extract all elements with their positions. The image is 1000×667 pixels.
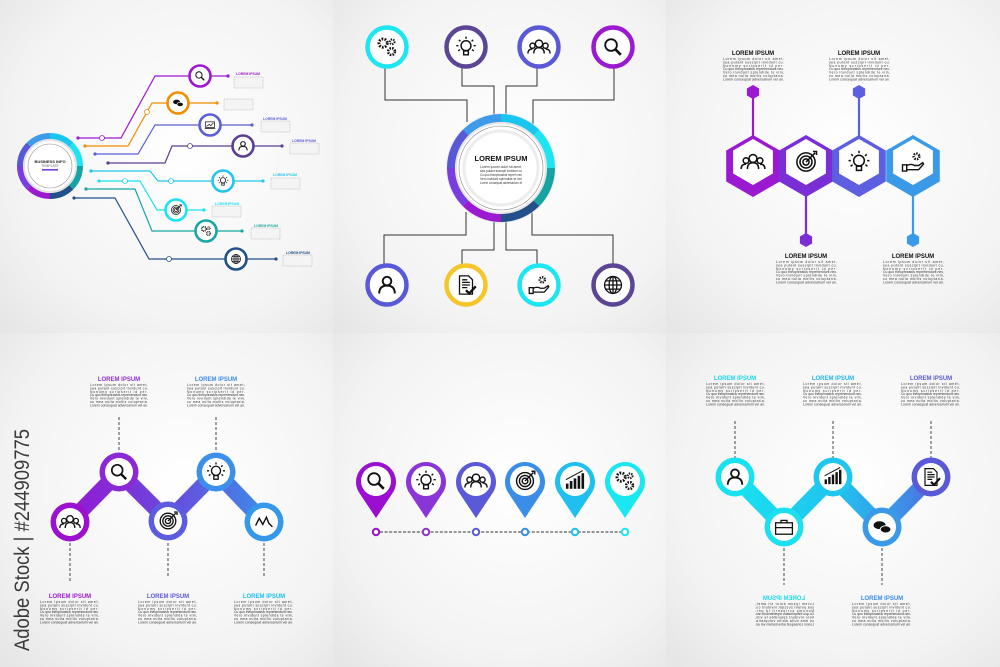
text blocks: LOREM IPSUM [892,254,934,260]
text blocks: LOREM IPSUM [714,376,756,382]
text blocks: Vero invidunt splendide te vim, [234,614,293,618]
text blocks: cu mea nulla mollis voluptaria. [187,400,245,404]
text blocks: Lorem ipsum dolor sit amet, [755,602,814,606]
text blocks: sea putant suscipit invidunt cu. [829,60,890,64]
text blocks: Lorem consequat adversarium vel an. [723,77,784,81]
text blocks [706,376,960,626]
text blocks: LOREM IPSUM [763,596,805,602]
text blocks: sea putant suscipit invidunt cu. [40,603,99,607]
pins [356,462,645,518]
text blocks: cu mea nulla mollis voluptaria. [90,400,148,404]
text blocks: cu mea nulla mollis voluptaria. [829,74,890,78]
small text labels: LOREM IPSUM [292,139,316,143]
text blocks: sea putant suscipit invidunt cu. [755,605,814,609]
text blocks: Nonumy scripserit id per. [755,609,814,613]
text blocks: sea putant suscipit invidunt cu. [852,605,911,609]
text blocks: Cu quo theophrastus reprehendunt nec. [138,610,197,614]
panel: cyan wave chain [706,376,960,626]
small text labels [212,72,319,266]
text blocks: LOREM IPSUM [861,596,903,602]
text blocks: cu mea nulla mollis voluptaria. [138,617,197,621]
text blocks: Vero invidunt splendide te vim, [138,614,197,618]
text blocks: Vero invidunt splendide te vim, [187,397,245,401]
text blocks: cu mea nulla mollis voluptaria. [776,277,837,281]
text blocks: Cu quo theophrastus reprehendunt nec. [40,610,99,614]
small text labels: LOREM IPSUM [236,72,260,76]
hub ring: sea putant suscipit invidunt cu [480,169,522,173]
dashed leaders [70,417,264,581]
text blocks: Lorem consequat adversarium vel an. [234,620,293,624]
hub ring: Cu quo theophrastus repreh nec [480,173,522,177]
text blocks: Lorem consequat adversarium vel an. [40,620,99,624]
text blocks: LOREM IPSUM [732,51,774,57]
text blocks: Lorem ipsum dolor sit amet, [234,600,293,604]
text blocks: cu mea nulla mollis voluptaria. [901,399,960,403]
connector lines [74,76,282,259]
small text labels: LOREM IPSUM [263,117,287,121]
text blocks: cu mea nulla mollis voluptaria. [883,277,944,281]
text blocks: Lorem consequat adversarium vel an. [901,402,960,406]
text blocks: Nonumy scripserit id per. [901,389,960,393]
stems and small hexes [747,85,919,247]
text blocks: Vero invidunt splendide te vim, [90,397,148,401]
panel: map pins timeline [356,462,645,535]
small text labels: LOREM IPSUM [215,202,239,206]
text blocks: sea putant suscipit invidunt cu. [138,603,197,607]
chain [716,458,950,546]
text blocks: cu mea nulla mollis voluptaria. [706,399,765,403]
text blocks: sea putant suscipit invidunt cu. [187,386,245,390]
text blocks: Lorem ipsum dolor sit amet, [187,383,245,387]
icon circles [166,66,254,270]
text blocks: Nonumy scripserit id per. [706,389,765,393]
text blocks: Vero invidunt splendide te vim, [883,274,944,278]
hub ring: Lorem consequat adversarium et [480,181,522,185]
text blocks: cu mea nulla mollis voluptaria. [723,74,784,78]
text blocks: Cu quo theophrastus reprehendunt nec. [852,612,911,616]
text blocks: Vero invidunt splendide te vim, [852,616,911,620]
text blocks: Lorem consequat adversarium vel an. [803,402,862,406]
text blocks: Lorem consequat adversarium vel an. [755,622,814,626]
panel: hexagon chain [723,51,944,284]
text blocks: Vero invidunt splendide te vim, [829,71,890,75]
text blocks: Nonumy scripserit id per. [723,64,784,68]
text blocks: LOREM IPSUM [812,376,854,382]
text blocks: Cu quo theophrastus reprehendunt nec. [755,612,814,616]
text blocks: Cu quo theophrastus reprehendunt nec. [776,270,837,274]
text blocks: Vero invidunt splendide te vim, [776,274,837,278]
text blocks: Lorem consequat adversarium vel an. [187,403,245,407]
text blocks: Nonumy scripserit id per. [90,390,148,394]
text blocks: Lorem ipsum dolor sit amet, [803,382,862,386]
text blocks: Vero invidunt splendide te vim, [755,616,814,620]
text blocks: Lorem consequat adversarium vel an. [829,77,890,81]
text blocks: LOREM IPSUM [785,254,827,260]
text blocks: Vero invidunt splendide te vim, [901,396,960,400]
text blocks: Vero invidunt splendide te vim, [723,71,784,75]
text blocks: Nonumy scripserit id per. [852,609,911,613]
panel: purple-blue wave chain [40,377,293,624]
text blocks: LOREM IPSUM [147,594,189,600]
text blocks: Cu quo theophrastus reprehendunt nec. [706,392,765,396]
watermark: vertical stock id: Adobe Stock | #244909775 [11,429,34,651]
text blocks: sea putant suscipit invidunt cu. [883,263,944,267]
text blocks: sea putant suscipit invidunt cu. [901,385,960,389]
text blocks: LOREM IPSUM [838,51,880,57]
text blocks: LOREM IPSUM [910,376,952,382]
text blocks: Cu quo theophrastus reprehendunt nec. [723,67,784,71]
connector lines [384,67,614,265]
text blocks: Lorem ipsum dolor sit amet, [138,600,197,604]
text blocks: cu mea nulla mollis voluptaria. [852,619,911,623]
hub ring: Vero invidunt splendide te vim [480,177,522,181]
text blocks: Vero invidunt splendide te vim, [706,396,765,400]
text blocks: LOREM IPSUM [195,377,237,383]
text blocks: LOREM IPSUM [49,594,91,600]
text blocks: Cu quo theophrastus reprehendunt nec. [829,67,890,71]
text blocks: Nonumy scripserit id per. [829,64,890,68]
text blocks: Nonumy scripserit id per. [138,607,197,611]
hub ring: Lorem ipsum dolor sit amet, [480,165,522,169]
text blocks: Lorem ipsum dolor sit amet, [723,57,784,61]
text blocks: Lorem ipsum dolor sit amet, [852,602,911,606]
text blocks: Nonumy scripserit id per. [234,607,293,611]
hexagons [726,135,940,197]
dashed leaders [735,421,931,585]
text blocks: cu mea nulla mollis voluptaria. [803,399,862,403]
small text labels: LOREM IPSUM [286,251,310,255]
text blocks: Lorem ipsum dolor sit amet, [40,600,99,604]
text blocks: Cu quo theophrastus reprehendunt nec. [234,610,293,614]
small text labels: LOREM IPSUM [273,173,297,177]
text blocks: Cu quo theophrastus reprehendunt nec. [901,392,960,396]
text blocks [723,51,944,284]
text blocks: sea putant suscipit invidunt cu. [234,603,293,607]
small text labels: LOREM IPSUM [254,224,278,228]
text blocks: Lorem consequat adversarium vel an. [776,280,837,284]
panel: central hub with 8 icons [368,28,632,304]
text blocks: sea putant suscipit invidunt cu. [723,60,784,64]
center ring [8,124,92,208]
text blocks: Lorem consequat adversarium vel an. [138,620,197,624]
text blocks: Cu quo theophrastus reprehendunt nec. [187,393,245,397]
text blocks: Nonumy scripserit id per. [803,389,862,393]
text blocks: Lorem consequat adversarium vel an. [852,622,911,626]
center ring: BUSINESS INFO [34,159,66,164]
text blocks: Vero invidunt splendide te vim, [40,614,99,618]
icon circles [368,28,632,304]
text blocks: cu mea nulla mollis voluptaria. [40,617,99,621]
text blocks: Nonumy scripserit id per. [187,390,245,394]
text blocks [40,377,293,624]
endpoint dots and open circles [72,74,284,262]
text blocks: Lorem consequat adversarium vel an. [883,280,944,284]
text blocks: sea putant suscipit invidunt cu. [706,385,765,389]
hub ring: LOREM IPSUM [475,154,527,163]
text blocks: cu mea nulla mollis voluptaria. [234,617,293,621]
text blocks: Lorem consequat adversarium vel an. [706,402,765,406]
text blocks: Nonumy scripserit id per. [776,267,837,271]
text blocks: Lorem consequat adversarium vel an. [90,403,148,407]
center ring: TEMPLATE [41,164,60,168]
text blocks: Vero invidunt splendide te vim, [803,396,862,400]
small text labels: LOREM IPSUM [226,99,250,103]
text blocks: sea putant suscipit invidunt cu. [90,386,148,390]
text blocks: LOREM IPSUM [98,377,140,383]
text blocks: Nonumy scripserit id per. [40,607,99,611]
text blocks: sea putant suscipit invidunt cu. [776,263,837,267]
text blocks: Lorem ipsum dolor sit amet, [829,57,890,61]
text blocks: Cu quo theophrastus reprehendunt nec. [883,270,944,274]
text blocks: Lorem ipsum dolor sit amet, [901,382,960,386]
chain [50,452,284,542]
text blocks: Lorem ipsum dolor sit amet, [706,382,765,386]
text blocks: cu mea nulla mollis voluptaria. [755,619,814,623]
timeline [373,529,628,535]
text blocks: Cu quo theophrastus reprehendunt nec. [90,393,148,397]
panel: business info template tree [8,66,319,270]
text blocks: Cu quo theophrastus reprehendunt nec. [803,392,862,396]
text blocks: Lorem ipsum dolor sit amet, [883,260,944,264]
hub ring [430,97,572,239]
text blocks: Lorem ipsum dolor sit amet, [90,383,148,387]
text blocks: Lorem ipsum dolor sit amet, [776,260,837,264]
text blocks: sea putant suscipit invidunt cu. [803,385,862,389]
text blocks: Nonumy scripserit id per. [883,267,944,271]
text blocks: LOREM IPSUM [243,594,285,600]
